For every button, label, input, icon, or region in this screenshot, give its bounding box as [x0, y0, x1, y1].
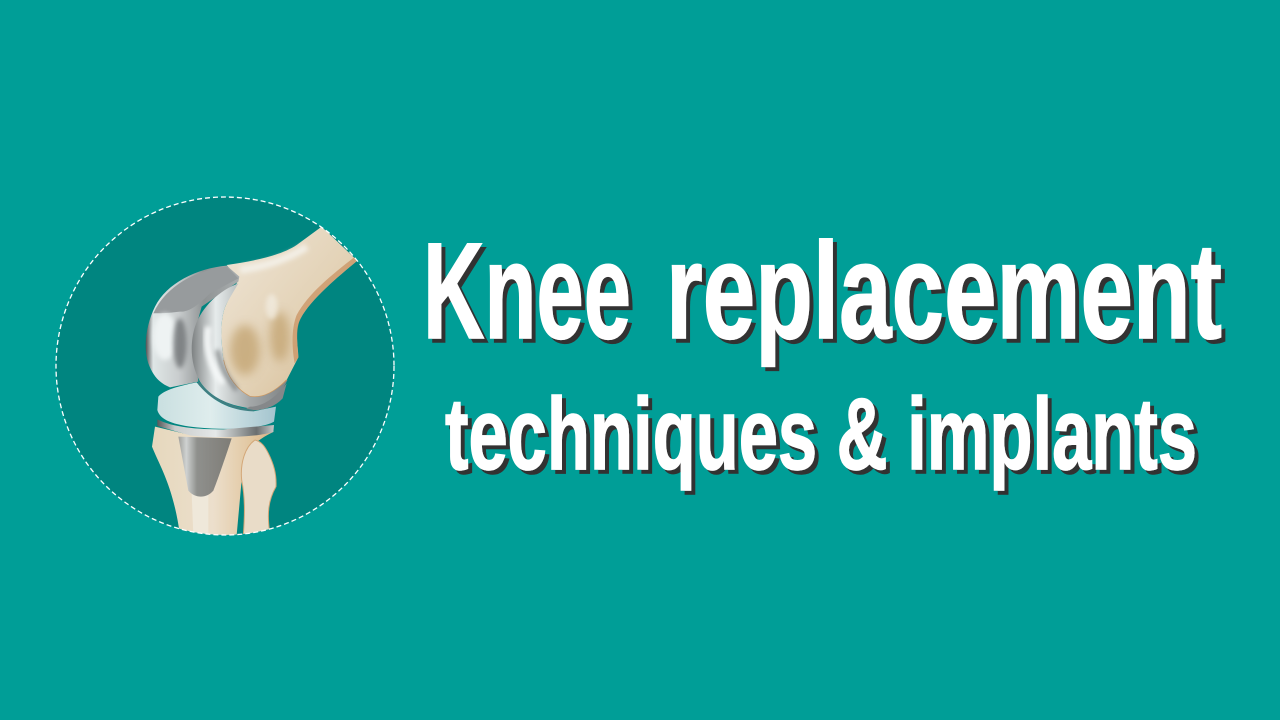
title: Knee	[423, 215, 631, 368]
icon: knee implant illustration	[146, 227, 357, 535]
circular knee illustration badge	[56, 197, 394, 535]
badge disc	[56, 197, 394, 535]
femoral component: metal	[146, 266, 288, 411]
tibial stem: metal	[178, 437, 232, 497]
fibula bone	[241, 440, 276, 535]
tibial tray: metal	[157, 419, 274, 437]
tibia bone	[152, 427, 274, 535]
tibial insert: polyethylene	[157, 382, 276, 429]
femur bone	[221, 227, 357, 397]
infographic canvas	[55, 196, 1226, 536]
tibial shaft highlight	[192, 493, 208, 535]
title	[423, 215, 1222, 368]
dashed ring	[56, 197, 394, 535]
